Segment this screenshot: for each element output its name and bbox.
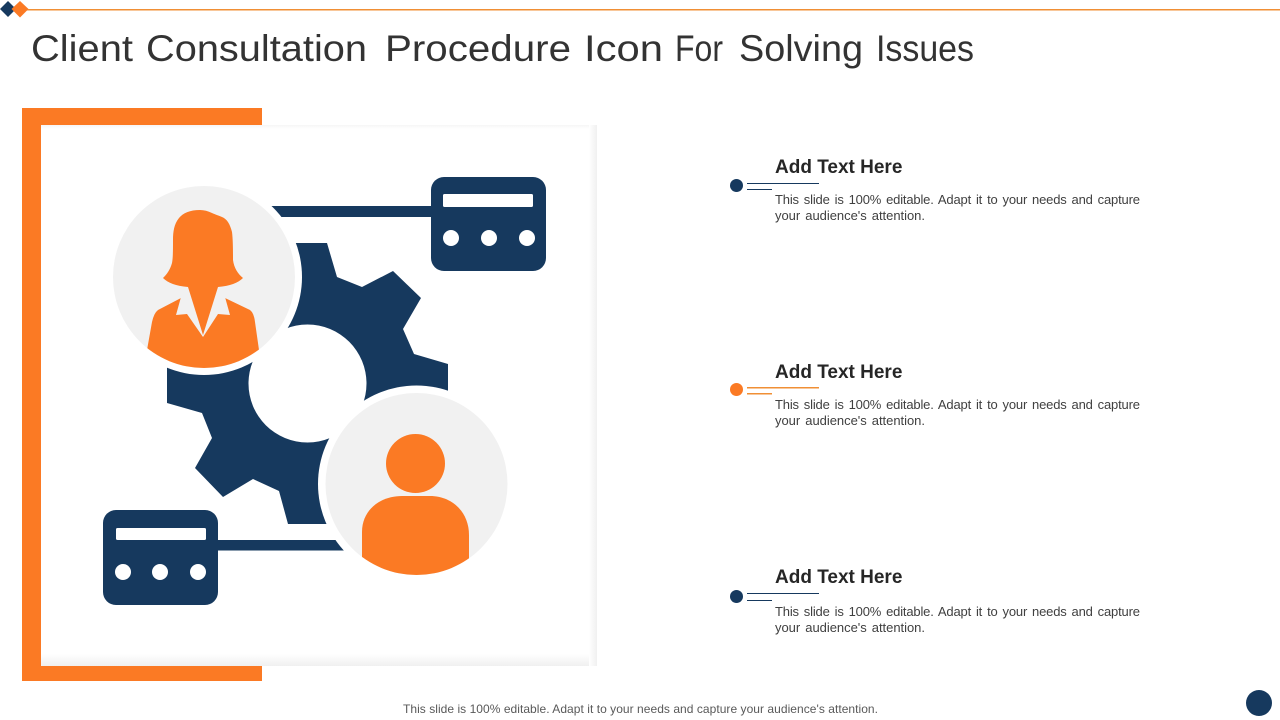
top decoration: diamonds and rule	[0, 1, 1280, 18]
heading 3: Add Text Here	[775, 567, 902, 588]
title: For	[675, 28, 723, 69]
title: Client	[31, 28, 134, 69]
heading 2: Add Text Here	[775, 362, 902, 383]
text block 3	[730, 567, 1140, 635]
body 1: This slide is 100% editable. Adapt it to your needs and capture	[775, 192, 1140, 207]
icon: gear	[167, 243, 448, 524]
panel: illustration frame	[22, 108, 597, 681]
body 3	[775, 604, 1140, 635]
heading 1: Add Text Here	[775, 157, 902, 178]
bullet marker 2	[730, 383, 819, 396]
title: Consultation	[146, 28, 367, 69]
icon: woman avatar	[106, 179, 302, 380]
title: Solving	[739, 28, 863, 69]
body 3: This slide is 100% editable. Adapt it to your needs and capture	[775, 604, 1140, 619]
body 1	[775, 192, 1140, 223]
body 3: your audience's attention.	[775, 620, 925, 635]
bullet marker 1	[730, 179, 819, 192]
body 2: This slide is 100% editable. Adapt it to your needs and capture	[775, 397, 1140, 412]
text block 2	[730, 362, 1140, 428]
title: Procedure	[385, 28, 571, 69]
title: Issues	[876, 28, 974, 69]
body 2: your audience's attention.	[775, 413, 925, 428]
icon: bottom card	[103, 510, 218, 605]
page marker dot	[1246, 690, 1272, 716]
connector: bottom card link	[215, 540, 355, 550]
connector: top card link	[262, 206, 434, 217]
footer note: This slide is 100% editable. Adapt it to your needs and capture your audience's attention.	[403, 702, 878, 716]
title: Icon	[584, 28, 663, 69]
icon: man avatar	[318, 386, 508, 575]
bullet marker 3	[730, 590, 819, 603]
body 2	[775, 397, 1140, 428]
text block 1	[730, 157, 1140, 223]
icon: top card	[431, 177, 546, 271]
title	[31, 28, 974, 69]
body 1: your audience's attention.	[775, 208, 925, 223]
